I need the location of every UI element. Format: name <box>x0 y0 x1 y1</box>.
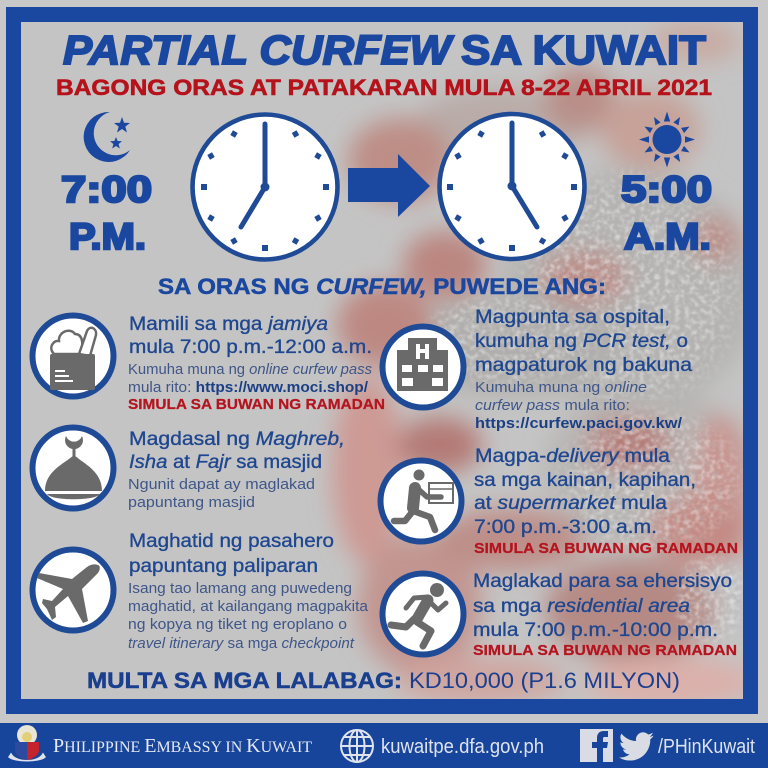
start time: 7:00 <box>61 169 152 210</box>
icon: facebook <box>580 729 613 762</box>
text: mosque: Ngunit dapat ay maglakad <box>128 477 315 493</box>
text: airport <box>128 530 369 652</box>
text: mosque: Magdasal ng Maghreb, <box>129 428 345 450</box>
end time: 5:00 <box>621 169 712 210</box>
text: hospital: Kumuha muna ng online <box>475 380 647 396</box>
background: blurred virus image <box>316 22 743 699</box>
icon: Philippine seal <box>9 725 45 761</box>
penalty line <box>87 668 680 693</box>
icon: crescent moon and stars <box>84 112 130 162</box>
item: hospital <box>382 306 692 432</box>
icon: airplane <box>32 550 114 630</box>
item: grocery <box>32 313 385 413</box>
icon: sun <box>639 112 695 168</box>
clock: 7:00 <box>192 114 338 260</box>
website: kuwaitpe.dfa.gov.ph <box>381 736 544 758</box>
text: delivery <box>474 445 738 557</box>
end time <box>621 169 712 257</box>
text: airport: Isang tao lamang ang puwedeng <box>128 581 352 597</box>
item: delivery <box>380 445 738 557</box>
penalty line: MULTA SA MGA LALABAG: <box>87 668 402 693</box>
title: SA KUWAIT <box>461 27 706 73</box>
text: grocery: mula rito: https://www.moci.shop/ <box>128 380 368 396</box>
icon: hospital <box>382 326 464 408</box>
text: airport: travel itinerary sa mga checkpoint <box>128 636 355 652</box>
text: grocery: SIMULA SA BUWAN NG RAMADAN <box>128 396 385 413</box>
item: mosque <box>32 428 345 511</box>
footer <box>0 723 768 768</box>
penalty line: KD10,000 (P1.6 MILYON) <box>409 668 680 693</box>
text: exercise: SIMULA SA BUWAN NG RAMADAN <box>473 642 737 659</box>
subtitle: BAGONG ORAS AT PATAKARAN MULA 8-22 ABRIL 2021 <box>56 75 712 100</box>
text: mosque <box>128 428 345 511</box>
text: exercise: sa mga residential area <box>473 595 690 617</box>
text: exercise <box>473 570 737 659</box>
text: delivery: Magpa- delivery mula <box>475 445 670 467</box>
embassy name: PHILIPPINE EMBASSY IN KUWAIT <box>53 736 313 757</box>
start time <box>61 169 152 257</box>
text: exercise: mula 7:00 p.m.-10:00 p.m. <box>473 619 718 641</box>
icon: twitter <box>619 732 654 761</box>
text: airport: Maghatid ng pasahero <box>129 530 334 552</box>
text: grocery: mula 7:00 p.m.-12:00 a.m. <box>129 336 372 358</box>
text: airport: papuntang paliparan <box>129 555 318 577</box>
text: grocery: Mamili sa mga jamiya <box>129 313 328 335</box>
text: grocery: Kumuha muna ng online curfew pass <box>128 362 372 378</box>
icon: globe <box>341 730 373 762</box>
start time: P.M. <box>69 216 146 257</box>
text: hospital: curfew pass mula rito: <box>475 398 630 414</box>
text: hospital <box>475 306 692 432</box>
text: exercise: Maglakad para sa ehersisyo <box>473 570 732 592</box>
text: mosque: Isha at Fajr sa masjid <box>129 451 322 473</box>
title: PARTIAL CURFEW <box>63 27 455 73</box>
text: airport: ng kopya ng tiket ng eroplano o <box>128 617 347 633</box>
icon: delivery person <box>380 460 462 542</box>
clock: 5:00 <box>440 114 584 259</box>
text: delivery: sa mga kainan, kapihan, <box>474 469 696 491</box>
text: grocery <box>128 313 385 413</box>
text: mosque: papuntang masjid <box>128 495 255 511</box>
text: hospital: magpaturok ng bakuna <box>475 354 692 376</box>
icon: mosque dome <box>32 428 114 508</box>
text: airport: maghatid, at kailangang magpakita <box>128 599 369 615</box>
text: hospital: Magpunta sa ospital, <box>475 306 670 328</box>
icon: grocery bag <box>32 316 114 396</box>
item: airport <box>32 530 369 652</box>
section heading: SA ORAS NG CURFEW, PUWEDE ANG: <box>158 274 606 299</box>
text: hospital: https://curfew.paci.gov.kw/ <box>475 416 682 432</box>
icon: runner <box>382 574 464 654</box>
item: exercise <box>382 570 737 659</box>
social handle: /PHinKuwait <box>658 736 755 758</box>
text: delivery: SIMULA SA BUWAN NG RAMADAN <box>474 540 738 557</box>
arrow <box>348 154 430 217</box>
end time: A.M. <box>624 216 711 257</box>
text: delivery: at supermarket mula <box>474 492 667 514</box>
text: hospital: kumuha ng PCR test, o <box>475 330 688 352</box>
text: delivery: 7:00 p.m.-3:00 a.m. <box>474 516 657 538</box>
title <box>63 27 706 73</box>
